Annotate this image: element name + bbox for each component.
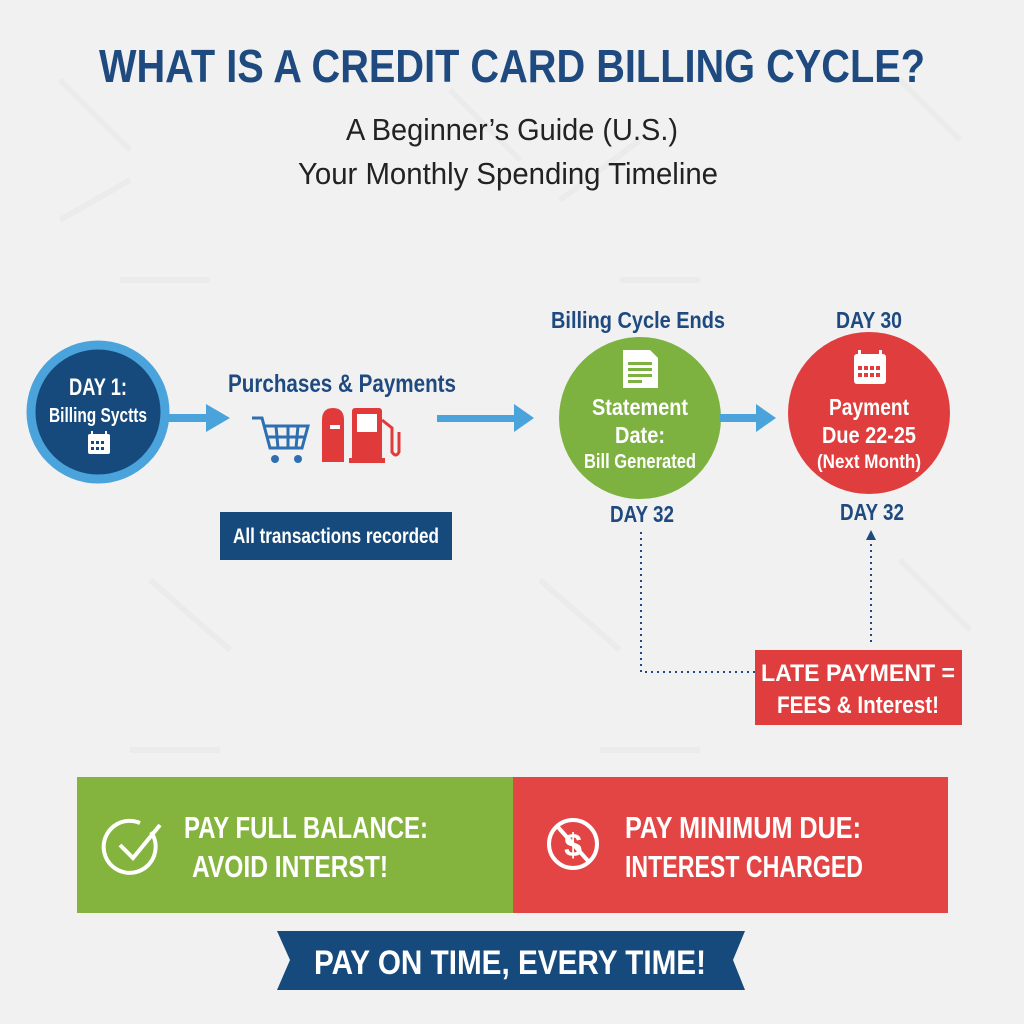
circle: statement date — [559, 337, 721, 499]
label: day 32 due: DAY 32 — [840, 499, 904, 525]
callout: late payment — [755, 650, 962, 725]
subtitle line 2: Your Monthly Spending Timeline — [298, 156, 718, 191]
circle: payment due: Payment — [829, 394, 909, 420]
banner: pay on time — [277, 931, 745, 990]
circle: day 1: DAY 1: — [69, 374, 127, 401]
icon: check — [104, 821, 160, 873]
box: all transactions recorded: All transactions recorded — [233, 525, 439, 548]
label: day 32 statement: DAY 32 — [610, 501, 674, 527]
dotted connector — [641, 532, 871, 672]
icon: no dollar: $ — [564, 827, 582, 863]
label: day 30: DAY 30 — [836, 307, 902, 333]
label: billing cycle ends: Billing Cycle Ends — [551, 307, 725, 333]
box: all transactions recorded — [220, 512, 452, 560]
icon: no dollar — [549, 820, 597, 868]
panel: pay full balance: PAY FULL BALANCE: — [184, 810, 428, 845]
heading: purchases & payments: Purchases & Payments — [228, 370, 456, 398]
arrow: purchases to statement — [437, 404, 534, 432]
arrow: day1 to purchases — [168, 404, 230, 432]
banner: pay on time: PAY ON TIME, EVERY TIME! — [314, 944, 706, 982]
callout: late payment: FEES & Interest! — [777, 692, 939, 719]
subtitle line 1: A Beginner’s Guide (U.S.) — [346, 112, 678, 147]
panel: pay minimum due: PAY MINIMUM DUE: — [625, 810, 861, 845]
arrow: statement to due — [720, 404, 776, 432]
panel: pay minimum due: INTEREST CHARGED — [625, 849, 863, 884]
icon: calendar — [88, 431, 110, 454]
circle: statement date: Date: — [615, 422, 665, 448]
circle: payment due — [788, 332, 950, 494]
icons: cart, mailbox, fuel — [252, 408, 399, 463]
circle: day 1 — [31, 345, 165, 479]
callout: late payment: LATE PAYMENT = — [761, 660, 955, 687]
circle: statement date: Statement — [592, 394, 688, 420]
panel: pay full balance: AVOID INTERST! — [192, 849, 388, 884]
circle: payment due: Due 22-25 — [822, 422, 916, 448]
circle: payment due: (Next Month) — [817, 452, 921, 473]
circle: statement date: Bill Generated — [584, 451, 696, 473]
panel: pay minimum due — [513, 777, 948, 913]
circle: day 1: Billing Syctts — [49, 405, 147, 427]
panel: pay full balance — [77, 777, 513, 913]
